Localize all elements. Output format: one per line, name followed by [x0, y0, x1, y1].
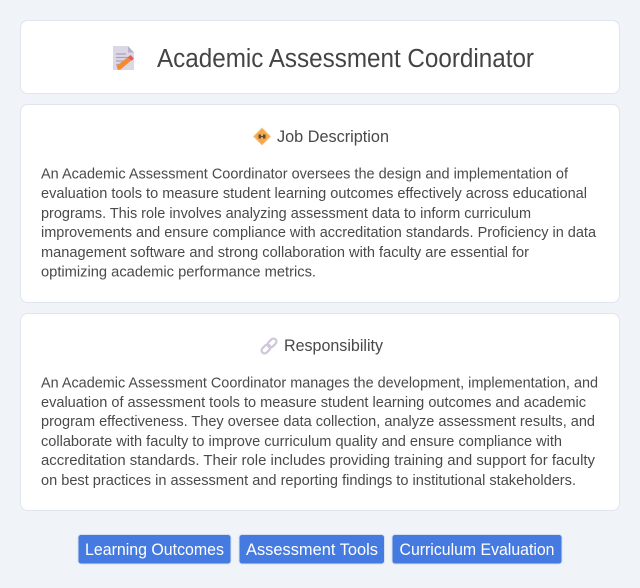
- tag: curriculum evaluation: [392, 534, 562, 564]
- job description text: programs. This role involves analyzing assessment data to inform curriculum: [41, 206, 531, 222]
- job description text: evaluation tools to measure student learning outcomes effectively across educational: [41, 186, 587, 202]
- responsibility text: collaborate with faculty to improve curriculum quality and ensure compliance with: [41, 434, 562, 450]
- panel: title: [20, 20, 620, 94]
- tag: learning outcomes: [78, 534, 231, 564]
- responsibility text: An Academic Assessment Coordinator manages the development, implementation, and: [41, 376, 598, 392]
- tag: assessment tools: Assessment Tools: [246, 541, 378, 559]
- panel: job description: [20, 104, 620, 302]
- icon: job description diamond: [254, 128, 270, 145]
- heading: responsibility: Responsibility: [284, 337, 384, 355]
- responsibility text: program effectiveness. They oversee data collection, analyze assessment results, and: [41, 414, 595, 430]
- job description text: optimizing academic performance metrics.: [41, 264, 316, 280]
- tag: learning outcomes: Learning Outcomes: [85, 541, 224, 559]
- responsibility text: [41, 376, 598, 489]
- job description text: An Academic Assessment Coordinator oversees the design and implementation of: [41, 166, 569, 182]
- job description text: [41, 166, 596, 280]
- panel: responsibility: [20, 314, 620, 510]
- job description text: management software and strong collaboration with faculty are essential for: [41, 245, 529, 261]
- responsibility text: evaluation of assessment tools to measure student learning outcomes and academic: [41, 395, 586, 411]
- title text: Academic Assessment Coordinator: [157, 45, 534, 73]
- tag: assessment tools: [239, 534, 384, 564]
- job description text: improvements and ensure compliance with accreditation standards. Proficiency in data: [41, 225, 596, 241]
- tag: curriculum evaluation: Curriculum Evaluation: [400, 541, 554, 559]
- icon: link: [260, 337, 278, 355]
- responsibility text: on best practices in assessment and reporting findings to institutional stakeholders.: [41, 473, 576, 489]
- icon: document with pencil: [113, 46, 134, 70]
- responsibility text: accreditation standards. Their role includes providing training and support for faculty: [41, 453, 596, 469]
- heading: job description: Job Description: [277, 128, 389, 146]
